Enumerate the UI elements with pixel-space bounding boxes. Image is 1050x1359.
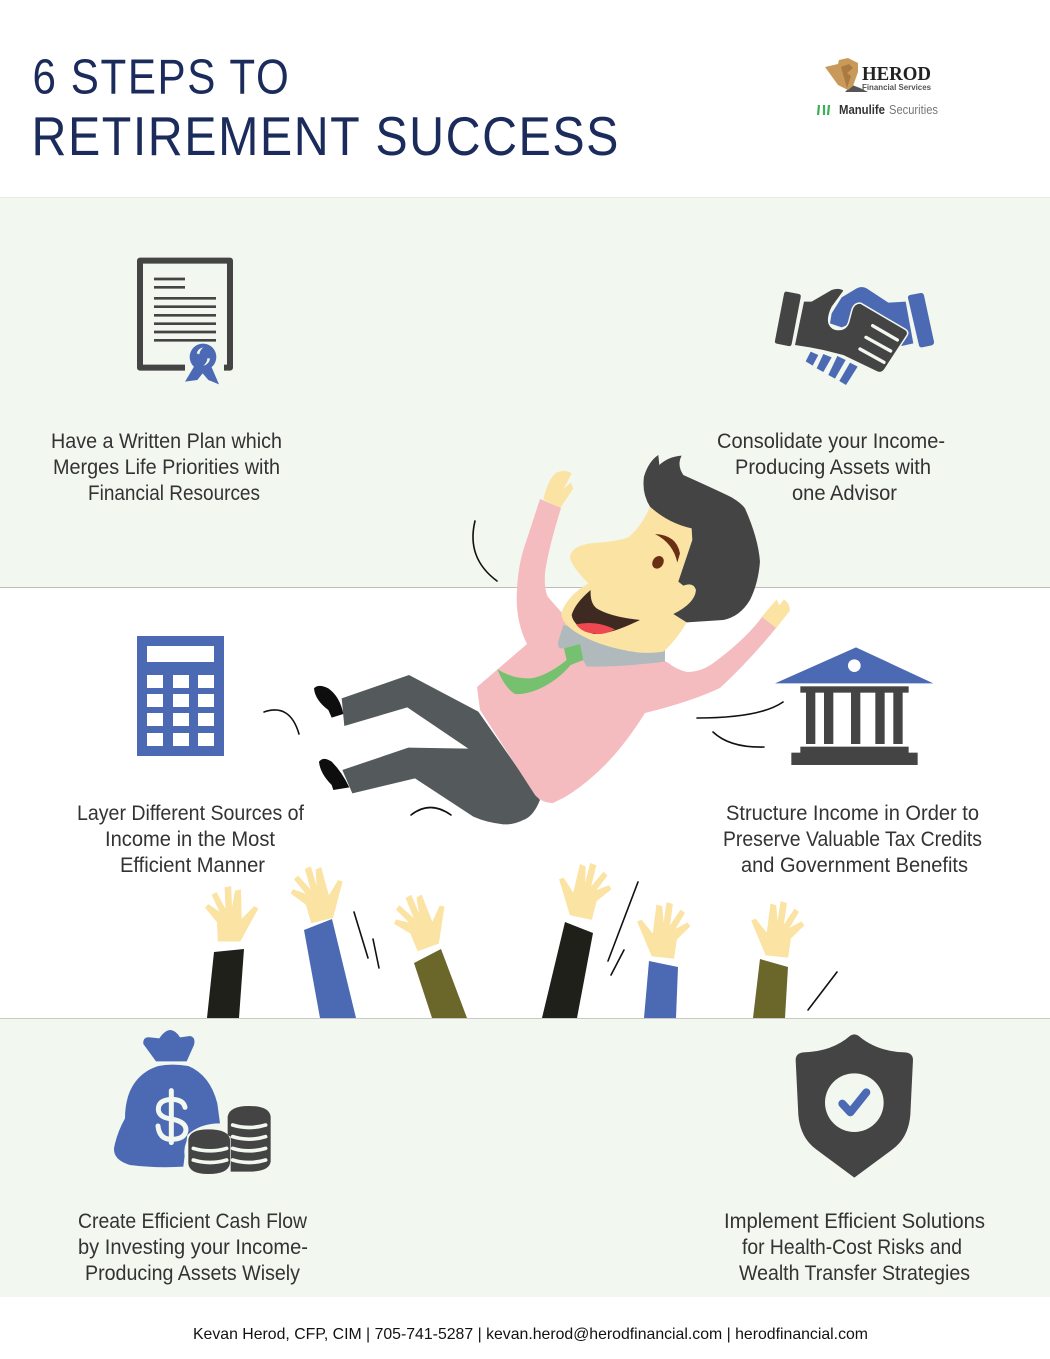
icon: Manulife mark <box>818 105 829 115</box>
mouth <box>572 590 640 634</box>
text: step 1: Financial Resources <box>88 482 260 505</box>
arm 6 <box>748 899 806 1018</box>
shirt <box>477 499 776 803</box>
text: step 4 <box>723 802 982 877</box>
text: step 5: Create Efficient Cash Flow <box>78 1210 308 1233</box>
arm 2 <box>286 860 356 1018</box>
text: step 3: Layer Different Sources of <box>77 802 304 825</box>
text: step 1: Have a Written Plan which <box>51 430 282 453</box>
illustration: raised arms <box>206 858 806 1018</box>
icon: Herod logo block <box>825 58 868 92</box>
text: step 5 <box>78 1210 308 1285</box>
footer contact line: Kevan Herod, CFP, CIM | 705-741-5287 | kevan.herod@herodfinancial.com | herodfinancial.com <box>193 1326 868 1343</box>
title: 6 STEPS TO <box>32 50 289 104</box>
arm 5 <box>634 900 692 1018</box>
text: step 4: and Government Benefits <box>741 854 968 877</box>
text: step 3 <box>77 802 304 877</box>
text: step 6: Wealth Transfer Strategies <box>739 1262 970 1285</box>
illustration: falling man <box>314 455 790 824</box>
collar <box>558 625 665 667</box>
motion lines around the arms <box>354 882 837 1010</box>
text: step 2: one Advisor <box>792 482 897 505</box>
hands of the man <box>543 471 790 628</box>
title: RETIREMENT SUCCESS <box>32 105 618 167</box>
text: step 4: Structure Income in Order to <box>726 802 979 825</box>
face <box>561 507 696 653</box>
icon: shield with check <box>796 1034 913 1178</box>
icon: calculator <box>137 636 224 756</box>
hair <box>643 455 760 622</box>
arm 1 <box>206 887 258 1018</box>
text: step 5: by Investing your Income- <box>78 1236 308 1259</box>
text: step 2: Consolidate your Income- <box>717 430 945 453</box>
text: step 4: Preserve Valuable Tax Credits <box>723 828 982 851</box>
shoes <box>314 686 349 790</box>
tongue <box>576 623 615 634</box>
icon: written plan certificate <box>140 261 230 384</box>
logo: Herod Financial Services and Manulife Securities: Manulife <box>839 103 885 117</box>
arm 3 <box>388 886 467 1018</box>
text: step 2 <box>717 430 945 505</box>
text: step 2: Producing Assets with <box>735 456 931 479</box>
text: step 6 <box>724 1210 985 1285</box>
arm 4 <box>542 858 615 1018</box>
icon: bank building <box>775 647 933 765</box>
panel: top green band <box>0 197 1050 587</box>
logo: Herod Financial Services and Manulife Securities <box>818 58 938 117</box>
title <box>32 50 618 167</box>
text: step 5: Producing Assets Wisely <box>85 1262 300 1285</box>
text: step 6: for Health-Cost Risks and <box>742 1236 962 1259</box>
text: step 3: Income in the Most <box>105 828 275 851</box>
text: step 3: Efficient Manner <box>120 854 265 877</box>
motion lines around the man <box>264 521 783 815</box>
icon: money bag and coins <box>114 1030 271 1176</box>
text: step 1 <box>51 430 282 505</box>
logo: Herod Financial Services and Manulife Securities: Securities <box>889 103 938 117</box>
logo: Herod Financial Services and Manulife Securities: Financial Services <box>862 82 931 92</box>
text: step 1: Merges Life Priorities with <box>53 456 280 479</box>
panel: bottom green band <box>0 1018 1050 1297</box>
text: step 6: Implement Efficient Solutions <box>724 1210 985 1233</box>
tie <box>497 644 583 694</box>
icon: handshake <box>775 287 934 385</box>
eye and brow <box>650 534 680 571</box>
pants and legs <box>342 675 540 824</box>
logo: Herod Financial Services and Manulife Securities: HEROD <box>862 63 931 85</box>
